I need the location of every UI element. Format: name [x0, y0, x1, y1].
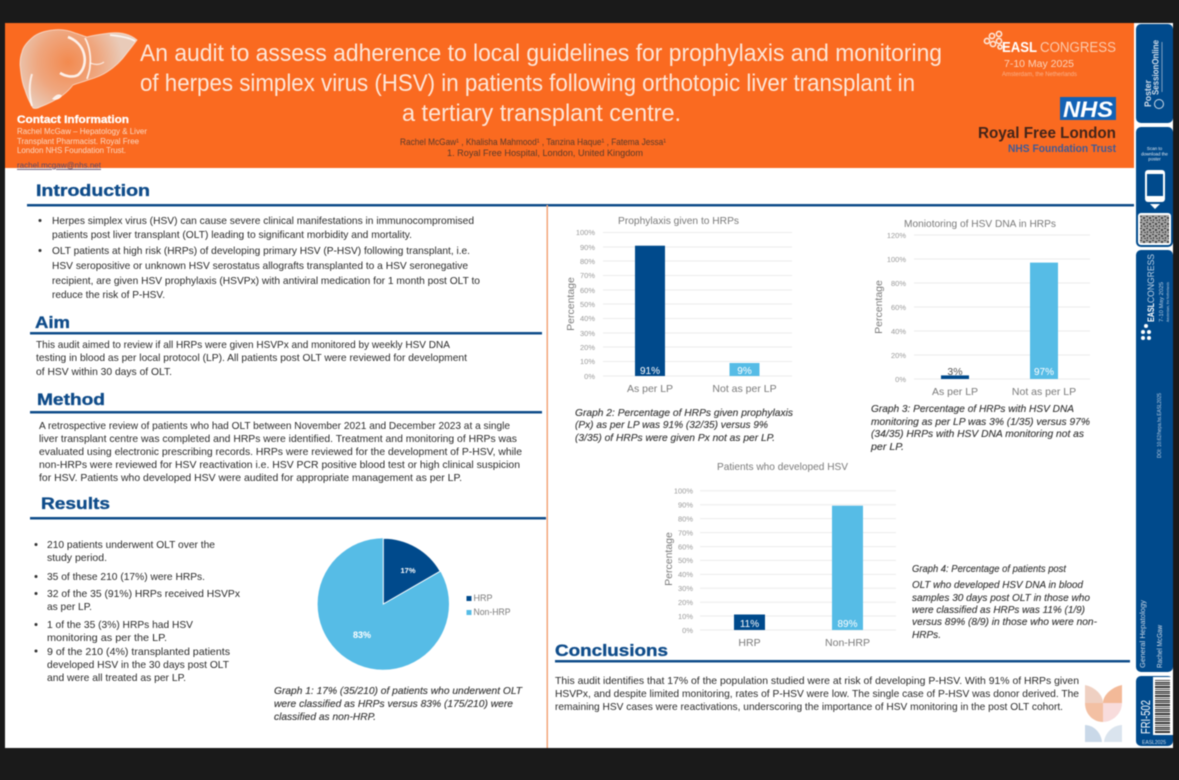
authors and affiliation: [400, 137, 666, 158]
results bullets: 1 of the 35 (3%) HRPs had HSV: [47, 619, 193, 631]
results bullets: as per LP.: [47, 601, 92, 613]
sidebar: EASL congress strip: EASL: [1146, 303, 1157, 322]
caption: graph 2: Graph 2: Percentage of HRPs given prophylaxis: [575, 407, 794, 419]
sidebar: EASL congress strip: DOI: 10.62/hepa.hs.EASL2025: [1157, 393, 1163, 458]
sidebar: QR download: [1136, 127, 1173, 247]
bar chart: patients who developed HSV: HRP: [738, 637, 761, 649]
bar chart: patients who developed HSV: [663, 461, 896, 649]
bar chart: patients who developed HSV: 89%: [837, 619, 858, 630]
bar chart: patients who developed HSV: Patients who developed HSV: [717, 461, 848, 473]
results bullets: 210 patients underwent OLT over the: [47, 539, 215, 551]
bar chart: prophylaxis given to HRPs: 50%: [580, 300, 595, 309]
aim text: This audit aimed to review if all HRPs were given HSVPx and monitored by weekly HSV DNA: [36, 339, 450, 351]
bar chart: prophylaxis given to HRPs: 91%: [640, 366, 660, 377]
contact information: [17, 114, 147, 170]
sidebar: poster session online: Poster: [1143, 80, 1153, 107]
pie legend: [466, 593, 510, 618]
method text: non-HRPs were reviewed for HSV reactivation i.e. HSV PCR positive blood test or high clinical suspicion: [39, 459, 520, 471]
sidebar: poster number and barcode: EASL2025: [1142, 740, 1166, 746]
introduction bullets: Herpes simplex virus (HSV) can cause severe clinical manifestations in immunocompromised: [52, 215, 474, 227]
caption: graph 3: Graph 3: Percentage of HRPs with HSV DNA: [871, 403, 1074, 415]
heading: conclusions: Conclusions: [555, 641, 668, 660]
bar chart: monitoring of HSV DNA in HRPs: Not as per LP: [1012, 386, 1076, 398]
heading: method: Method: [37, 390, 105, 409]
aim text: of HSV within 30 days of OLT.: [36, 366, 172, 378]
panel: aim: [30, 313, 542, 378]
NHS Royal Free London logo: Royal Free London: [978, 125, 1116, 142]
EASL congress logo: CONGRESS: [1040, 39, 1116, 56]
bar chart: patients who developed HSV: Percentage: [663, 532, 675, 586]
title: a tertiary transplant centre.: [402, 100, 681, 127]
bar chart: patients who developed HSV: 20%: [678, 598, 693, 607]
sidebar: EASL congress strip: General Hepatology: [1140, 599, 1147, 668]
method text: A retrospective review of patients who had OLT between November 2021 and December 2023 at a single: [39, 420, 510, 432]
bar chart: patients who developed HSV: 80%: [678, 514, 693, 524]
caption: graph 4: HRPs.: [912, 629, 941, 641]
bar chart: prophylaxis given to HRPs: Prophylaxis given to HRPs: [618, 215, 739, 227]
bar chart: prophylaxis given to HRPs: 90%: [580, 243, 595, 252]
bar chart: prophylaxis given to HRPs: As per LP: [627, 383, 673, 395]
bar chart: prophylaxis given to HRPs: 0%: [584, 372, 595, 381]
contact information: Transplant Pharmacist. Royal Free: [17, 136, 139, 146]
method text: [39, 420, 522, 484]
caption: graph 2: [575, 407, 794, 444]
caption: graph 4: were classified as HRPs was 11% (1/9): [912, 604, 1085, 616]
bar chart: patients who developed HSV: 50%: [678, 556, 693, 565]
bar chart: prophylaxis given to HRPs: 20%: [580, 343, 595, 352]
heading: introduction: Introduction: [36, 181, 150, 200]
NHS Royal Free London logo: NHS: [1063, 97, 1113, 122]
pie legend: HRP: [474, 593, 492, 604]
bar chart: prophylaxis given to HRPs: 30%: [580, 329, 595, 338]
bar chart: patients who developed HSV: 40%: [678, 570, 693, 579]
caption: graph 3: (34/35) HRPs with HSV DNA monitoring not as: [871, 428, 1085, 440]
results bullets: monitoring as per the LP.: [47, 632, 167, 644]
heading: results: Results: [41, 494, 110, 513]
title: An audit to assess adherence to local guidelines for prophylaxis and monitoring: [140, 40, 942, 67]
bar chart: monitoring of HSV DNA in HRPs: [873, 218, 1090, 398]
results bullets: and were all treated as per LP.: [47, 672, 186, 684]
EASL congress logo: Amsterdam, the Netherlands: [1002, 72, 1077, 78]
bar chart: prophylaxis given to HRPs: Not as per LP: [712, 383, 777, 395]
caption: graph 3: per LP.: [870, 441, 904, 453]
caption: graph 1: [274, 685, 524, 723]
bar chart: patients who developed HSV: 60%: [678, 542, 693, 552]
introduction bullets: patients post liver transplant (OLT) leading to significant morbidity and mortality.: [52, 229, 412, 241]
panel: conclusions: [555, 641, 1130, 713]
bar chart: prophylaxis given to HRPs: 70%: [580, 271, 595, 280]
caption: graph 4: OLT who developed HSV DNA in blood: [912, 579, 1084, 591]
conclusions text: HSVPx, and despite limited monitoring, rates of P-HSV were low. The single case of P-HSV was donor derived. The: [555, 688, 1079, 700]
sidebar: QR download: poster: [1148, 156, 1161, 162]
results bullets: [34, 539, 241, 684]
sidebar: QR download: download the: [1141, 152, 1168, 156]
pie chart: HRP share: 83%: [353, 630, 371, 640]
contact information: Contact Information: [17, 114, 129, 126]
bar chart: prophylaxis given to HRPs: 9%: [737, 366, 752, 377]
sidebar: EASL congress strip: [1136, 250, 1173, 672]
bar chart: prophylaxis given to HRPs: 100%: [576, 228, 595, 237]
conclusions text: This audit identifies that 17% of the population studied were at risk of developing P-HSV. With 91% of HRPs given: [555, 675, 1079, 687]
panel: header banner: [5, 23, 1134, 170]
title: [140, 40, 942, 127]
bar chart: patients who developed HSV: 30%: [678, 584, 693, 593]
sidebar: EASL congress strip: Amsterdam, the Netherlands: [1166, 282, 1170, 322]
sidebar: poster number and barcode: FRI-502: [1138, 700, 1153, 734]
NHS Royal Free London logo: [978, 97, 1116, 155]
aim text: [36, 339, 467, 378]
panel: method: [30, 390, 542, 484]
introduction bullets: HSV seropositive or unknown HSV serostatus allografts transplanted to a HSV seronegative: [52, 260, 468, 272]
introduction bullets: [38, 215, 480, 301]
caption: graph 2: (Px) as per LP was 91% (32/35) versus 9%: [575, 419, 768, 431]
pie legend: Non-HRP: [474, 607, 510, 618]
icon: tulip watermark: [1085, 685, 1122, 742]
panel: sidebar: [1134, 23, 1173, 748]
caption: graph 3: monitoring as per LP was 3% (1/35) versus 97%: [871, 416, 1090, 428]
sidebar: poster session online: [1136, 24, 1173, 123]
bar chart: patients who developed HSV: 90%: [678, 500, 693, 510]
introduction bullets: recipient, are given HSV prophylaxis (HSVPx) with antiviral medication for 1 month post OLT to: [52, 275, 480, 287]
results bullets: 35 of these 210 (17%) were HRPs.: [47, 571, 205, 583]
contact information: London NHS Foundation Trust.: [17, 145, 126, 155]
NHS Royal Free London logo: NHS Foundation Trust: [1008, 143, 1116, 155]
bar chart: prophylaxis given to HRPs: 60%: [580, 286, 595, 295]
heading: aim: Aim: [35, 313, 70, 332]
introduction bullets: reduce the risk of P-HSV.: [52, 289, 165, 301]
bar chart: prophylaxis given to HRPs: Percentage: [565, 277, 577, 331]
introduction bullets: OLT patients at high risk (HRPs) of developing primary HSV (P-HSV) following transplant, i.e.: [52, 245, 470, 257]
panel: results: [30, 494, 546, 723]
conclusions text: [555, 675, 1079, 713]
bar chart: monitoring of HSV DNA in HRPs: 20%: [891, 351, 906, 360]
caption: graph 4: [912, 563, 1097, 641]
sidebar: EASL congress strip: CONGRESS: [1146, 254, 1157, 303]
icon: phone: [1145, 170, 1165, 209]
sidebar: poster number and barcode: [1136, 676, 1173, 746]
caption: graph 1: were classified as HRPs versus 83% (175/210) were: [274, 698, 513, 710]
EASL congress logo: EASL: [1002, 39, 1037, 56]
bar chart: patients who developed HSV: 11%: [740, 619, 759, 630]
bar chart: prophylaxis given to HRPs: [565, 215, 792, 395]
bar chart: monitoring of HSV DNA in HRPs: 80%: [891, 279, 906, 288]
bar chart: monitoring of HSV DNA in HRPs: 3%: [947, 366, 963, 378]
conclusions text: remaining HSV cases were reactivations, underscoring the importance of HSV monitoring in the post OLT cohort.: [555, 701, 1063, 713]
caption: graph 4: samples 30 days post OLT in those who: [912, 592, 1090, 604]
EASL congress logo: [984, 31, 1116, 78]
caption: graph 4: Graph 4: Percentage of patients post: [912, 563, 1067, 575]
contact information: Rachel McGaw – Hepatology & Liver: [17, 126, 147, 136]
bar chart: monitoring of HSV DNA in HRPs: 60%: [891, 303, 906, 312]
caption: graph 1: classified as non-HRP.: [274, 711, 376, 723]
bar chart: patients who developed HSV: 0%: [682, 626, 693, 635]
caption: graph 2: (3/35) of HRPs were given Px not as per LP.: [575, 432, 775, 444]
bar chart: monitoring of HSV DNA in HRPs: 97%: [1034, 367, 1054, 378]
sidebar: EASL congress strip: 7-10 May 2025: [1159, 282, 1165, 322]
bar chart: patients who developed HSV: 10%: [678, 612, 693, 621]
caption: graph 1: Graph 1: 17% (35/210) of patients who underwent OLT: [274, 685, 524, 697]
bar chart: patients who developed HSV: 100%: [674, 486, 693, 496]
caption: graph 4: versus 89% (8/9) in those who were non-: [912, 616, 1097, 628]
method text: evaluated using electronic prescribing records. HRPs were reviewed for the development of P-HSV, while: [39, 446, 522, 458]
bar chart: monitoring of HSV DNA in HRPs: Percentage: [873, 280, 885, 334]
contact information: rachel.mcgaw@nhs.net: [17, 160, 102, 170]
results bullets: developed HSV in the 30 days post OLT: [47, 659, 230, 671]
bar chart: prophylaxis given to HRPs: 40%: [580, 314, 595, 323]
sidebar: QR download: Scan to: [1147, 146, 1163, 151]
bar chart: patients who developed HSV: 70%: [678, 528, 693, 538]
sidebar: poster session online: SessionOnline: [1150, 40, 1160, 95]
QR code: [1138, 213, 1171, 245]
method text: liver transplant centre was completed and HRPs were identified. Treatment and monitoring of HRPs was: [39, 433, 517, 445]
aim text: testing in blood as per local protocol (LP). All patients post OLT were reviewed for development: [36, 352, 467, 364]
bar chart: prophylaxis given to HRPs: 80%: [580, 257, 595, 266]
icon: liver: [20, 30, 137, 108]
method text: for HSV. Patients who developed HSV were audited for appropriate management as per LP.: [39, 472, 462, 484]
bar chart: monitoring of HSV DNA in HRPs: 120%: [887, 231, 906, 240]
results bullets: 9 of the 210 (4%) transplanted patients: [47, 646, 230, 658]
sidebar: EASL congress strip: Rachel McGaw: [1157, 624, 1164, 668]
authors and affiliation: 1. Royal Free Hospital, London, United Kingdom: [447, 148, 643, 158]
bar chart: patients who developed HSV: Non-HRP: [825, 637, 870, 649]
pie chart: HRP share: [318, 538, 510, 670]
title: of herpes simplex virus (HSV) in patients following orthotopic liver transplant in: [140, 70, 915, 97]
panel: introduction: [36, 181, 480, 301]
EASL congress logo: 7-10 May 2025: [1004, 59, 1074, 70]
bar chart: prophylaxis given to HRPs: 10%: [580, 357, 595, 366]
results bullets: 32 of the 35 (91%) HRPs received HSVPx: [47, 588, 241, 600]
bar chart: monitoring of HSV DNA in HRPs: 40%: [891, 327, 906, 336]
caption: graph 3: [870, 403, 1090, 453]
authors and affiliation: Rachel McGaw¹ , Khalisha Mahmood¹ , Tanzina Haque¹ , Fatema Jessa¹: [400, 137, 666, 147]
results bullets: study period.: [47, 552, 107, 564]
pie chart: HRP share: 17%: [400, 566, 416, 575]
bar chart: monitoring of HSV DNA in HRPs: As per LP: [932, 386, 978, 398]
icon: EASL flower: [984, 31, 1002, 49]
bar chart: monitoring of HSV DNA in HRPs: 100%: [887, 255, 906, 264]
bar chart: monitoring of HSV DNA in HRPs: 0%: [895, 375, 906, 384]
bar chart: monitoring of HSV DNA in HRPs: Moniotoring of HSV DNA in HRPs: [904, 218, 1056, 230]
